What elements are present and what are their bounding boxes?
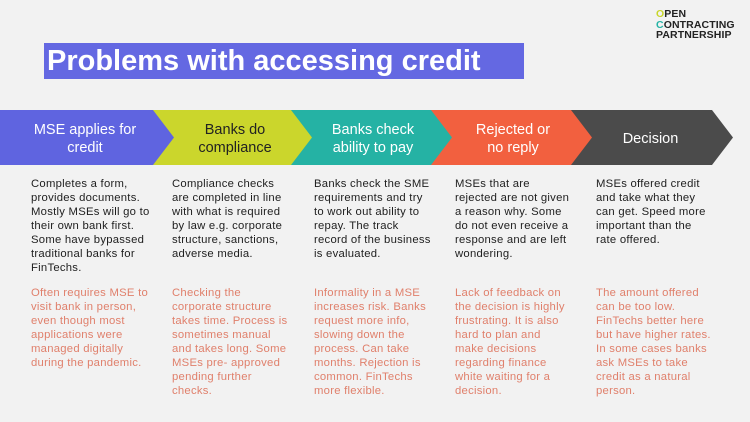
column 3 <box>314 178 431 260</box>
text: In some cases banks <box>596 343 707 355</box>
column 1: provides documents. <box>31 192 140 204</box>
column 5: important than the <box>596 220 692 232</box>
column 4: do not even receive a <box>455 220 568 232</box>
text: increases risk. Banks <box>314 301 426 313</box>
column 4: a reason why. Some <box>455 206 562 218</box>
text: ask MSEs to take <box>596 357 688 369</box>
text: request more info, <box>314 315 410 327</box>
column 1: FinTechs. <box>31 262 82 274</box>
text: slowing down the <box>314 329 405 341</box>
text: FinTechs better here <box>596 315 704 327</box>
text: the decision is highly <box>455 301 565 313</box>
text: more flexible. <box>314 385 385 397</box>
text: but have higher rates. <box>596 329 711 341</box>
column 3: record of the business <box>314 234 431 246</box>
text: decision. <box>455 385 502 397</box>
text: applications were <box>31 329 123 341</box>
text: checks. <box>172 385 212 397</box>
text: visit bank in person, <box>31 301 136 313</box>
text: Banks do <box>205 122 265 138</box>
column 5: rate offered. <box>596 234 660 246</box>
text: person. <box>596 385 635 397</box>
text: hard to plan and <box>455 329 541 341</box>
column 3: Banks check the SME <box>314 178 429 190</box>
text: pending further <box>172 371 252 383</box>
column 5: and take what they <box>596 192 695 204</box>
step labels: MSE applies for <box>34 122 136 138</box>
title: Problems with accessing credit <box>47 45 481 77</box>
column 2: by law e.g. corporate <box>172 220 282 232</box>
column 4: wondering. <box>455 248 513 260</box>
logo: OPEN <box>656 8 686 20</box>
column 1: Completes a form, <box>31 178 128 190</box>
step labels: credit <box>67 140 103 156</box>
column 4 <box>455 178 569 260</box>
column 2: are completed in line <box>172 192 282 204</box>
text: no reply <box>487 140 539 156</box>
text: compliance <box>198 140 272 156</box>
text: sometimes manual <box>172 329 271 341</box>
text: managed digitally <box>31 343 123 355</box>
column 3: to work out ability to <box>314 206 419 218</box>
column 2 <box>172 178 282 260</box>
text: Informality in a MSE <box>314 287 420 299</box>
text: Often requires MSE to <box>31 287 148 299</box>
text: Banks check <box>332 122 414 138</box>
text: even though most <box>31 315 125 327</box>
text: Checking the <box>172 287 241 299</box>
text: credit as a natural <box>596 371 691 383</box>
text: Decision <box>623 130 678 146</box>
text: frustrating. It is also <box>455 315 559 327</box>
column 2: Compliance checks <box>172 178 274 190</box>
text: ability to pay <box>333 140 413 156</box>
text: and takes long. Some <box>172 343 286 355</box>
text: takes time. Process is <box>172 315 287 327</box>
text: Lack of feedback on <box>455 287 561 299</box>
text: Rejected or <box>476 122 550 138</box>
column 1 <box>31 178 150 274</box>
text: can be too low. <box>596 301 675 313</box>
column 2: with what is required <box>172 206 280 218</box>
column 1: traditional banks for <box>31 248 135 260</box>
column 3: repay. The track <box>314 220 399 232</box>
column 1: their own bank first. <box>31 220 134 232</box>
text: corporate structure <box>172 301 272 313</box>
text: common. FinTechs <box>314 371 413 383</box>
column 1: Mostly MSEs will go to <box>31 206 150 218</box>
logo: PARTNERSHIP <box>656 29 732 41</box>
text: months. Rejection is <box>314 357 421 369</box>
column 1: Some have bypassed <box>31 234 144 246</box>
text: make decisions <box>455 343 536 355</box>
text: MSEs pre- approved <box>172 357 280 369</box>
process arrows <box>0 110 733 165</box>
step labels <box>34 122 136 156</box>
text: process. Can take <box>314 343 409 355</box>
text: white waiting for a <box>455 371 550 383</box>
column 5 <box>596 178 706 246</box>
text: during the pandemic. <box>31 357 142 369</box>
column 3: requirements and try <box>314 192 423 204</box>
column 2: adverse media. <box>172 248 253 260</box>
text: The amount offered <box>596 287 699 299</box>
column 3: is evaluated. <box>314 248 381 260</box>
logo: CONTRACTING <box>656 18 735 30</box>
text: regarding finance <box>455 357 547 369</box>
column 4: MSEs that are <box>455 178 530 190</box>
column 4: response and are left <box>455 234 566 246</box>
column 5: MSEs offered credit <box>596 178 700 190</box>
column 2: structure, sanctions, <box>172 234 278 246</box>
column 4: rejected are not given <box>455 192 569 204</box>
logo <box>656 8 735 41</box>
column 5: can get. Speed more <box>596 206 706 218</box>
